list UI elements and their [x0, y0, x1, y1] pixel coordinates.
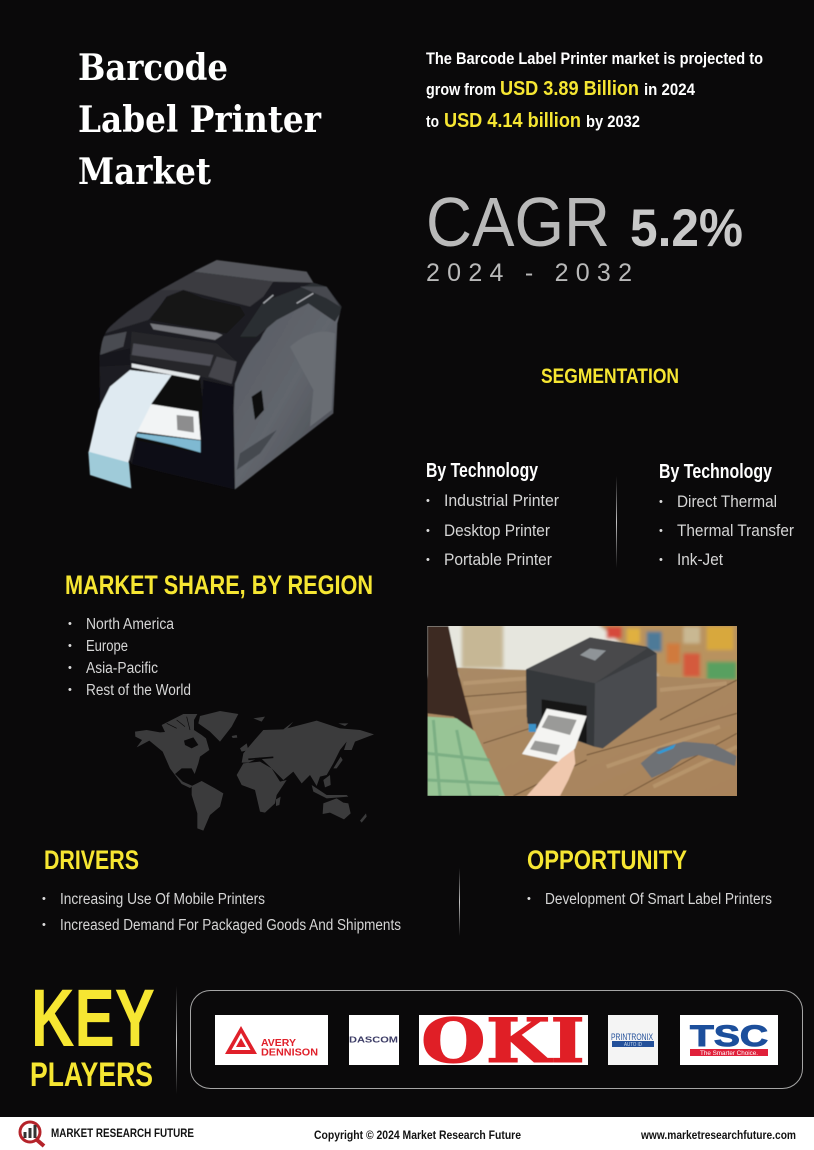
segment list: by technology, print method: • [659, 525, 663, 537]
logo: Dascom [349, 1015, 399, 1065]
CAGR figure: CAGR [426, 183, 610, 261]
segment list: by technology, printer type: By Technology [426, 460, 539, 482]
market projection text: USD 4.14 billion [444, 110, 581, 132]
drivers list: • [42, 893, 46, 905]
CAGR figure: 5.2% [630, 199, 743, 258]
region list: North America [86, 616, 174, 633]
CAGR figure [426, 183, 743, 287]
segment list: by technology, print method: Direct Thermal [677, 492, 777, 511]
title: Market [78, 151, 211, 193]
segmentation heading: SEGMENTATION [541, 365, 679, 388]
footer bar [0, 1117, 814, 1150]
drivers list: • [42, 919, 46, 931]
segment list: by technology, printer type: • [426, 525, 430, 537]
market projection text: in 2024 [644, 80, 695, 99]
region list: Europe [86, 638, 128, 655]
segment list: by technology, print method: • [659, 554, 663, 566]
icon: magnifier logo [20, 1122, 44, 1146]
logo: Printronix: AUTO ID [624, 1042, 642, 1048]
opportunity list: Development Of Smart Label Printers [545, 891, 772, 908]
segment list: by technology, printer type: Industrial Printer [444, 491, 559, 510]
opportunity list: • [527, 893, 531, 905]
drivers list: Increasing Use Of Mobile Printers [60, 891, 265, 908]
segment list: by technology, print method: By Technology [659, 461, 773, 483]
logo: Avery Dennison [215, 1015, 328, 1065]
region list: • [68, 618, 72, 630]
segment list: by technology, printer type [426, 460, 559, 569]
segment list: by technology, printer type: • [426, 554, 430, 566]
title [78, 47, 322, 193]
printer [522, 637, 657, 763]
world map [135, 711, 374, 831]
market projection text: by 2032 [586, 112, 640, 131]
region list: Rest of the World [86, 682, 191, 699]
region list: • [68, 684, 72, 696]
logo: Dascom: DASCOM [349, 1036, 398, 1044]
icon: thermal barcode printer [88, 258, 343, 490]
region list: • [68, 640, 72, 652]
title: Label Printer [78, 99, 322, 141]
market share heading: MARKET SHARE, BY REGION [65, 570, 373, 600]
panel: key player logos [190, 990, 802, 1088]
market projection text: grow from [426, 80, 496, 99]
logo: Avery Dennison: AVERY [261, 1038, 296, 1049]
CAGR figure: 2024 - 2032 [426, 259, 632, 287]
segment list: by technology, print method: Thermal Transfer [677, 521, 794, 540]
opportunity heading: OPPORTUNITY [527, 845, 687, 875]
market projection text: USD 3.89 Billion [500, 78, 639, 100]
segment list: by technology, printer type: Portable Printer [444, 550, 552, 569]
segment list: by technology, print method [659, 461, 794, 569]
woman [427, 626, 505, 796]
drivers list: Increased Demand For Packaged Goods And Shipments [60, 917, 401, 934]
logo: TSC: TSC [690, 1020, 768, 1053]
key players heading [30, 973, 155, 1094]
company name: MARKET RESEARCH FUTURE [51, 1126, 194, 1140]
market projection text [426, 49, 763, 132]
store background [427, 626, 737, 681]
title: Barcode [78, 47, 228, 89]
logo: Printronix [608, 1015, 658, 1065]
region list [68, 616, 191, 699]
logo: OKI: OKI [421, 1006, 585, 1077]
key players heading: PLAYERS [30, 1056, 153, 1094]
logo: TSC [680, 1015, 778, 1065]
market projection text: to [426, 112, 439, 131]
scanner [641, 742, 737, 778]
drivers heading: DRIVERS [44, 845, 139, 875]
logo: Printronix: PRINTRONIX [611, 1032, 653, 1043]
photo: desktop label printer and scanner on a wooden table [427, 626, 737, 796]
region list: • [68, 662, 72, 674]
copyright: Copyright © 2024 Market Research Future [314, 1128, 521, 1142]
hand [527, 749, 575, 796]
logo: Avery Dennison: DENNISON [261, 1048, 318, 1058]
region list: Asia-Pacific [86, 660, 158, 677]
logo: TSC: The Smarter Choice. [700, 1051, 758, 1057]
drivers list [42, 891, 401, 934]
wooden table [457, 668, 747, 800]
market projection text: The Barcode Label Printer market is projected to [426, 49, 763, 68]
key players heading: KEY [31, 973, 155, 1064]
segment list: by technology, printer type: Desktop Printer [444, 521, 550, 540]
segment list: by technology, printer type: • [426, 495, 430, 507]
segment list: by technology, print method: • [659, 496, 663, 508]
segment list: by technology, print method: Ink-Jet [677, 550, 723, 569]
